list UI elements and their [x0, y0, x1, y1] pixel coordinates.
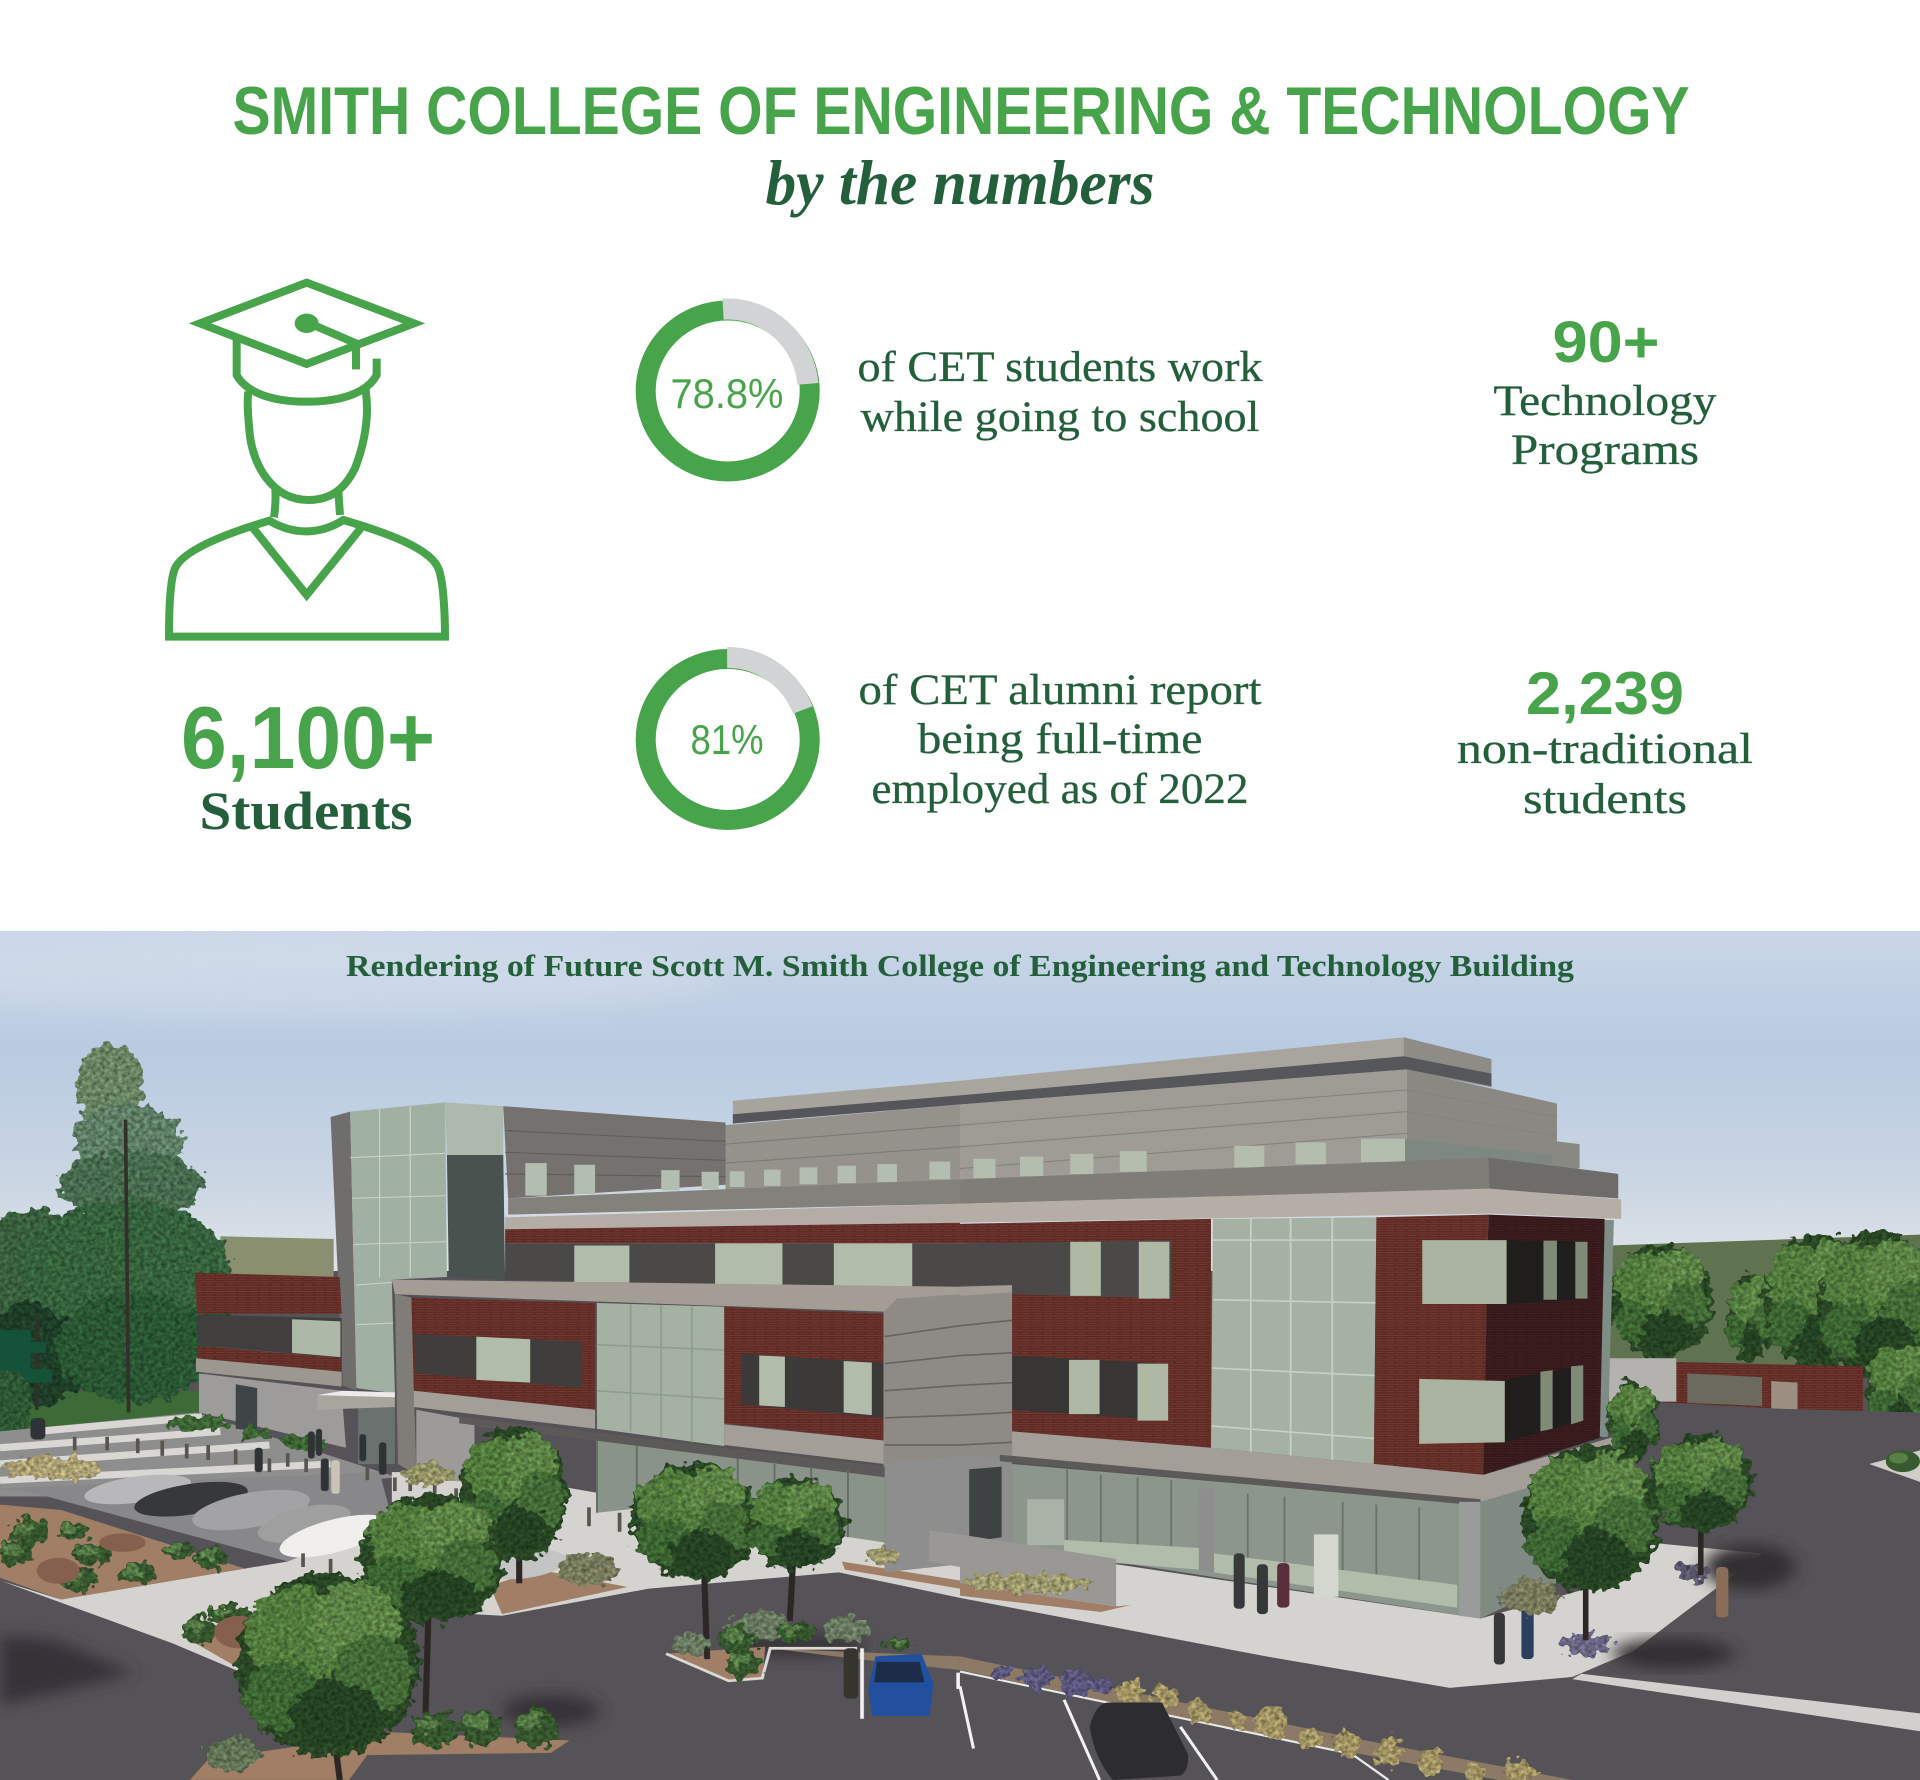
roof fascia of lower volume: [392, 1280, 960, 1312]
text: alumni employed: being full-time: [918, 716, 1202, 763]
penthouse: [960, 1037, 1580, 1179]
left wing: [195, 1273, 346, 1448]
planting bed by low wall: [960, 1583, 1131, 1612]
people and plantings: [960, 1553, 1728, 1665]
paved plaza: [0, 1412, 398, 1496]
text: alumni employed: [858, 667, 1262, 813]
text: students working: while going to school: [860, 394, 1260, 441]
title: SMITH COLLEGE OF ENGINEERING & TECHNOLOGY: [232, 73, 1690, 149]
left half of rendering: [0, 1044, 960, 1780]
planting island: [666, 1647, 765, 1681]
text: alumni employed: of CET alumni report: [858, 667, 1262, 714]
planting island at far right: [1869, 1450, 1920, 1482]
stat: technology programs: Technology: [1494, 378, 1717, 425]
stat: technology programs: 90+: [1552, 310, 1660, 375]
donut chart: 81%: 81%: [690, 716, 764, 763]
boulders: [37, 1533, 263, 1648]
text: students working: [858, 344, 1263, 441]
shadows: [1612, 1544, 1796, 1669]
background pine trees: [0, 1044, 236, 1404]
planting bed: [0, 1505, 245, 1599]
right half of rendering: [960, 1037, 1920, 1780]
front brick wall: [960, 1219, 1211, 1448]
upper walls: [503, 1106, 726, 1198]
pedestrians: [31, 1418, 386, 1494]
building rendering illustration: [0, 931, 1920, 1780]
donut chart: 78.8%: 78.8%: [670, 370, 784, 417]
asphalt: [960, 1404, 1920, 1780]
donut chart: 78.8%: [643, 305, 812, 477]
concrete sidewalk: [960, 1543, 1762, 1688]
lower roof tie-in: [960, 1285, 1012, 1296]
belt course: [1012, 1431, 1614, 1502]
dark car: [1090, 1702, 1188, 1780]
person and blue car: [844, 1648, 858, 1699]
planting bed: bottom: [190, 1732, 569, 1780]
entry canopy and doors: [358, 1407, 395, 1464]
corner grey volume: [960, 1288, 1012, 1564]
stat: technology programs: [1494, 310, 1717, 474]
parking median: [960, 1656, 1572, 1780]
parked cars: [82, 1469, 568, 1583]
stat: non-traditional students: non-traditional: [1457, 726, 1753, 773]
students label: Students: [200, 781, 412, 841]
text: students working: of CET students work: [858, 344, 1263, 391]
bollards: [75, 1437, 620, 1573]
stat: technology programs: Programs: [1511, 427, 1699, 474]
parapet and fascia: [960, 1158, 1618, 1204]
green sign: [0, 1330, 52, 1383]
ground floor glazing: [1000, 1455, 1600, 1618]
students stat number: 6,100+: [181, 688, 435, 787]
central glass: [1211, 1217, 1376, 1464]
subtitle: by the numbers: [766, 147, 1154, 218]
corner volume: [883, 1294, 960, 1572]
rear wall: [1640, 1361, 1863, 1412]
low concrete wall: [960, 1534, 1116, 1607]
ground floor left: [416, 1410, 887, 1543]
text: alumni employed: employed as of 2022: [872, 766, 1248, 813]
asphalt tree shadows: [0, 1635, 869, 1727]
stat: non-traditional students: [1457, 660, 1753, 823]
foreground trees: [334, 1526, 793, 1780]
concrete walk: [0, 1472, 960, 1673]
low plants: [0, 1416, 900, 1643]
distant landscape and trees: [1609, 1231, 1920, 1377]
donut chart: 81%: [646, 658, 810, 822]
roof parapet and fascia: [508, 1179, 960, 1215]
rendering caption: Rendering of Future Scott M. Smith College of Engineering and Technology Building: [346, 948, 1575, 983]
tower: [331, 1102, 505, 1393]
parking lines: [960, 1686, 1217, 1780]
brick corner: [1374, 1215, 1614, 1475]
right trees: [1586, 1450, 1701, 1640]
stat: non-traditional students: 2,239: [1526, 660, 1684, 727]
second floor left: [395, 1294, 885, 1475]
icon: graduate: [169, 283, 445, 637]
stat: non-traditional students: students: [1523, 776, 1687, 823]
